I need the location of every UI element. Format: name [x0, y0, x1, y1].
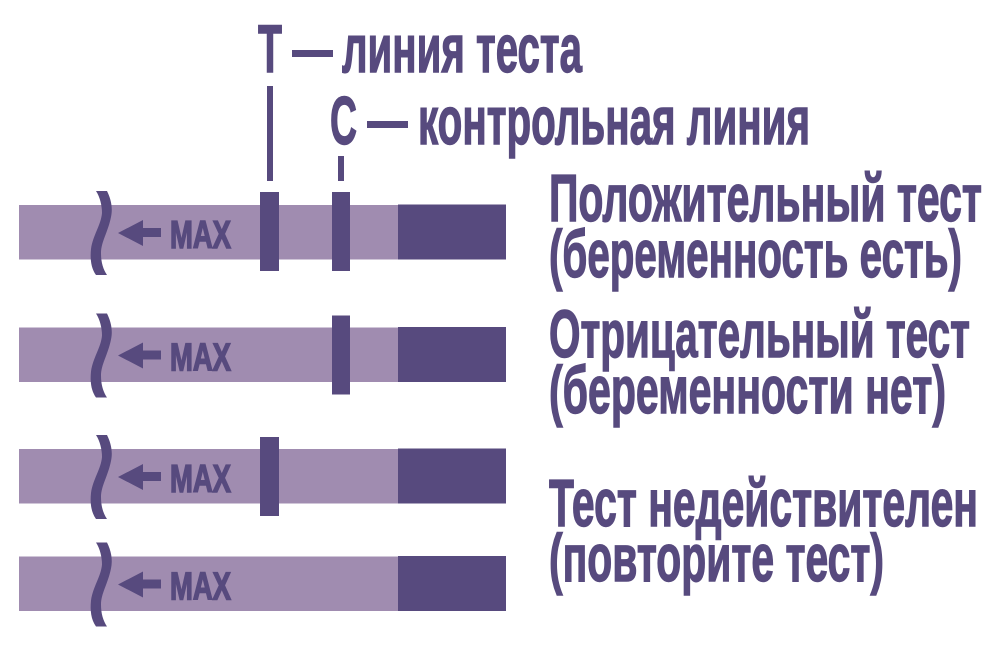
test strip: negative: MAX — [170, 336, 231, 380]
legend: C control line: С — [330, 83, 357, 159]
label: invalid test — [549, 466, 978, 596]
test strip: positive: MAX — [170, 214, 231, 257]
legend: T test line — [258, 11, 583, 181]
legend: T test line: Т — [258, 11, 282, 87]
test strip: negative — [19, 314, 506, 398]
legend: C control line — [330, 83, 810, 181]
test strip: invalid, T line only: MAX — [170, 458, 231, 501]
test strip: positive — [19, 191, 506, 275]
label: negative test — [549, 297, 970, 428]
label: positive test — [549, 161, 982, 292]
test strip: invalid, T line only — [19, 435, 506, 519]
test strip: invalid, no lines — [19, 542, 506, 626]
legend: T test line: линия теста — [342, 11, 583, 87]
test strip: invalid, no lines: MAX — [170, 566, 231, 608]
